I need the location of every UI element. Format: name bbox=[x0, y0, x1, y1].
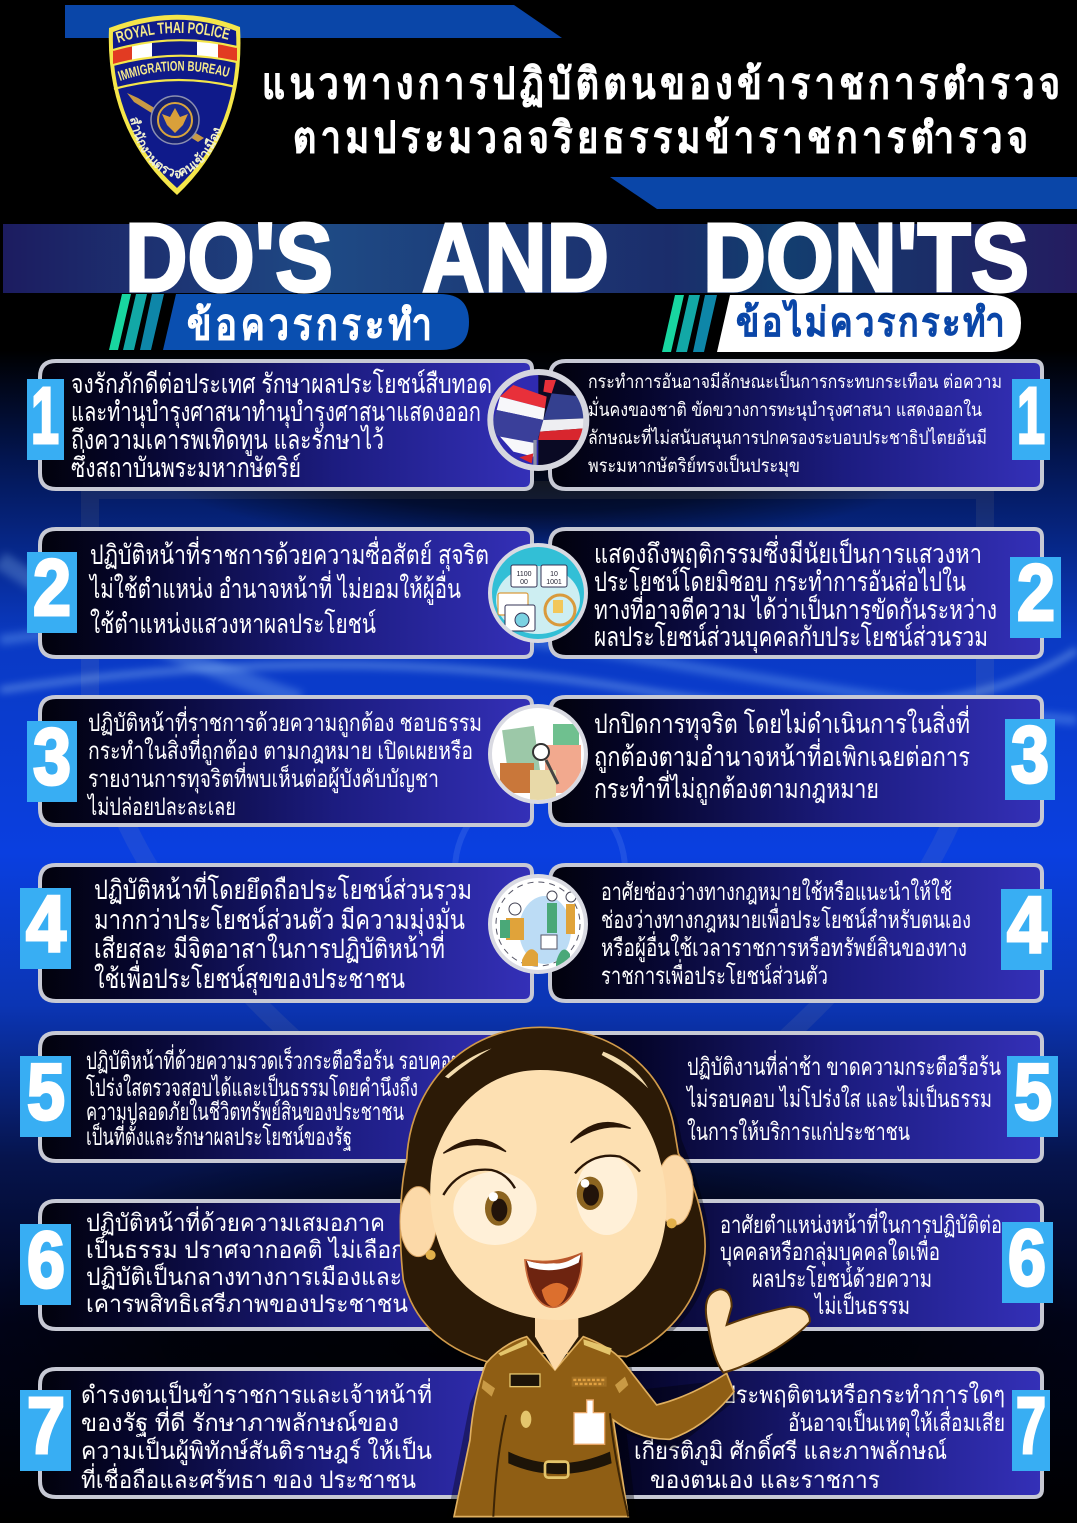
icon: people meeting bbox=[488, 874, 588, 974]
icon: data monitors: 1001 bbox=[546, 579, 562, 586]
don'ts card 7: ของตนเอง และราชการ bbox=[650, 1467, 880, 1494]
right numbers: 5 bbox=[1014, 1047, 1052, 1136]
do's card 1: และทำนุบำรุงศาสนาทำนุบำรุงศาสนาแสดงออก bbox=[71, 397, 481, 429]
don'ts card 4: อาศัยช่องว่างทางกฎหมายใช้หรือแนะนำให้ใช้ bbox=[601, 878, 952, 906]
don'ts card 6: ผลประโยชน์ด้วยความ bbox=[752, 1265, 932, 1293]
sub-heading: do's: ข้อควรกระทำ bbox=[187, 302, 432, 349]
don'ts card 6 bbox=[550, 1201, 1042, 1329]
do's card 2: ไม่ใช้ตำแหน่ง อำนาจหน้าที่ ไม่ยอมให้ผู้อื่น bbox=[88, 570, 461, 605]
character: police officer bbox=[400, 1027, 810, 1520]
neck bbox=[535, 1313, 578, 1371]
right numbers: 6 bbox=[1008, 1213, 1046, 1302]
left numbers: 3 bbox=[33, 712, 71, 801]
ears bbox=[400, 1187, 437, 1257]
do's card 4: มากกว่าประโยชน์ส่วนตัว มีความมุ่งมั่น bbox=[94, 901, 465, 937]
do's card 6: ปฏิบัติเป็นกลางทางการเมืองและ bbox=[86, 1262, 402, 1291]
do's card 1: จงรักภักดีต่อประเทศ รักษาผลประโยชน์สืบทอด bbox=[71, 368, 492, 399]
do's card 7: ความเป็นผู้พิทักษ์สันติราษฎร์ ให้เป็น bbox=[81, 1436, 432, 1466]
belt bbox=[508, 1452, 612, 1478]
sub-heading: do's bbox=[109, 294, 469, 350]
do's card 3: ไม่ปล่อยปละละเลย bbox=[86, 793, 236, 821]
badge text bbox=[115, 22, 230, 178]
don'ts card 5: ในการให้บริการแก่ประชาชน bbox=[687, 1118, 910, 1146]
left numbers: 5 bbox=[27, 1047, 65, 1136]
icon: data monitors: 10 bbox=[550, 571, 558, 578]
left numbers bbox=[26, 371, 71, 1470]
badge text: IMMIGRATION BUREAU bbox=[118, 61, 230, 81]
do's card 4: ใช้เพื่อประโยชน์สุขของประชาชน bbox=[94, 960, 405, 996]
do's card 3: กระทำในสิ่งที่ถูกต้อง ตามกฎหมาย เปิดเผยหรือ bbox=[88, 734, 473, 766]
heading band bbox=[3, 224, 1077, 293]
don'ts card 3: กระทำที่ไม่ถูกต้องตามกฎหมาย bbox=[594, 770, 879, 805]
mouth bbox=[525, 1253, 582, 1307]
left number tabs bbox=[20, 371, 77, 1471]
do's card 7: ดำรงตนเป็นข้าราชการและเจ้าหน้าที่ bbox=[81, 1378, 432, 1409]
right numbers bbox=[1007, 371, 1055, 1470]
do's card 5: ปฏิบัติหน้าที่ด้วยความรวดเร็วกระตือรือร้น รอบคอบ bbox=[86, 1044, 462, 1075]
do's card 1: ถึงความเคารพเทิดทูน และรักษาไว้ bbox=[71, 425, 384, 456]
badge text: ROYAL THAI POLICE bbox=[115, 22, 230, 43]
don'ts card 7: อันอาจเป็นเหตุให้เสื่อมเสีย bbox=[788, 1406, 1005, 1438]
sub-heading: don'ts bbox=[662, 295, 1021, 352]
don'ts card 7: ประพฤติตนหรือกระทำการใดๆ bbox=[722, 1381, 1005, 1409]
icon: thai flag bbox=[490, 372, 586, 468]
epaulettes and medals bbox=[482, 1339, 628, 1444]
don'ts card 4: หรือผู้อื่นใช้เวลาราชการหรือทรัพย์สินของทาง bbox=[601, 931, 967, 963]
earrings bbox=[426, 1250, 436, 1260]
do's card 2 bbox=[40, 529, 532, 657]
eyebrows bbox=[443, 1122, 631, 1153]
do's card 6 bbox=[40, 1201, 532, 1329]
don'ts card 2: ประโยชน์โดยมิชอบ กระทำการอันส่อไปใน bbox=[594, 566, 966, 597]
title bbox=[262, 61, 1060, 162]
icon: documents bbox=[488, 704, 588, 804]
right numbers: 3 bbox=[1011, 710, 1049, 799]
don'ts card 1: พระมหากษัตริย์ทรงเป็นประมุข bbox=[588, 453, 800, 478]
eyes bbox=[443, 1155, 640, 1245]
hair bbox=[400, 1027, 705, 1362]
do's card 2: ใช้ตำแหน่งแสวงหาผลประโยชน์ bbox=[90, 608, 376, 639]
do's card 6: เคารพสิทธิเสรีภาพของประชาชน bbox=[86, 1291, 408, 1318]
uniform bbox=[454, 1337, 734, 1517]
do's card 6: เป็นธรรม ปราศจากอคติ ไม่เลือก bbox=[86, 1235, 405, 1264]
don'ts card 7: เกียรติภูมิ ศักดิ์ศรี และภาพลักษณ์ bbox=[634, 1433, 947, 1466]
title: แนวทางการปฏิบัติตนของข้าราชการตำรวจ bbox=[262, 61, 1060, 108]
icon: data monitors bbox=[488, 543, 588, 643]
arm line bbox=[493, 1413, 628, 1517]
hair shine bbox=[445, 1048, 648, 1088]
don'ts card 3 bbox=[550, 697, 1042, 825]
don'ts card 1 bbox=[550, 361, 1042, 489]
main heading: DON'TS bbox=[703, 203, 1029, 312]
badge: immigration bureau shield bbox=[108, 14, 240, 195]
left numbers: 7 bbox=[27, 1381, 65, 1470]
do's card 5: เป็นที่ตั้งและรักษาผลประโยชน์ของรัฐ bbox=[86, 1119, 352, 1151]
title: ตามประมวลจริยธรรมข้าราชการตำรวจ bbox=[293, 115, 1028, 162]
do's card 6: ปฏิบัติหน้าที่ด้วยความเสมอภาค bbox=[86, 1206, 385, 1237]
don'ts card 1: มั่นคงของชาติ ขัดขวางการทะนุบำรุงศาสนา แสดงออกใน bbox=[588, 396, 982, 422]
don'ts card 6: บุคคลหรือกลุ่มบุคคลใดเพื่อ bbox=[720, 1235, 940, 1267]
do's card 3 bbox=[40, 697, 532, 825]
don'ts card 7 bbox=[550, 1369, 1042, 1497]
don'ts card 5 bbox=[550, 1033, 1042, 1161]
do's card 4: เสียสละ มีจิตอาสาในการปฏิบัติหน้าที่ bbox=[94, 930, 445, 964]
drop shadow bbox=[405, 1033, 740, 1520]
main heading: AND bbox=[422, 203, 609, 312]
don'ts card 4 bbox=[550, 865, 1042, 1001]
left numbers: 6 bbox=[27, 1215, 65, 1304]
don'ts card 1: ลักษณะที่ไม่สนับสนุนการปกครองระบอบประชาธิปไตยอันมี bbox=[588, 424, 987, 450]
main heading bbox=[125, 203, 1029, 312]
do's card 4 bbox=[40, 865, 532, 1001]
don'ts card 3: ปกปิดการทุจริต โดยไม่ดำเนินการในสิ่งที่ bbox=[594, 705, 970, 741]
right numbers: 1 bbox=[1017, 371, 1045, 460]
main heading: DO'S bbox=[125, 203, 333, 312]
lower right blue banner bbox=[610, 177, 1077, 209]
do's card 5: ความปลอดภัยในชีวิตทรัพย์สินของประชาชน bbox=[86, 1098, 404, 1126]
do's card 7: ของรัฐ ที่ดี รักษาภาพลักษณ์ของ bbox=[81, 1406, 399, 1437]
don'ts card 4: ช่องว่างทางกฎหมายเพื่อประโยชน์สำหรับตนเอง bbox=[601, 903, 971, 934]
do's card 5: โปร่งใสตรวจสอบได้และเป็นธรรมโดยคำนึงถึง bbox=[86, 1073, 418, 1102]
icon: data monitors: 00 bbox=[520, 579, 528, 586]
left numbers: 2 bbox=[33, 543, 71, 632]
right number tabs bbox=[1001, 371, 1061, 1471]
do's card 1: ซึ่งสถาบันพระมหากษัตริย์ bbox=[71, 449, 301, 483]
do's card 3: รายงานการทุจริตที่พบเห็นต่อผู้บังคับบัญชา bbox=[88, 762, 439, 794]
do's card 1 bbox=[40, 361, 532, 489]
don'ts card 6: ไม่เป็นธรรม bbox=[813, 1291, 910, 1320]
top blue banner bbox=[65, 5, 562, 38]
don'ts card 3: ถูกต้องตามอำนาจหน้าที่อเพิกเฉยต่อการ bbox=[594, 738, 970, 773]
do's card 7 bbox=[40, 1369, 532, 1497]
right numbers: 2 bbox=[1017, 548, 1055, 637]
don'ts card 1: กระทำการอันอาจมีลักษณะเป็นการกระทบกระเทือน ต่อความ bbox=[588, 369, 1002, 393]
do's card 7: ที่เชื่อถือและศรัทธา ของ ประชาชน bbox=[81, 1463, 416, 1494]
do's card 2: ปฏิบัติหน้าที่ราชการด้วยความซื่อสัตย์ สุจริต bbox=[90, 536, 489, 572]
right numbers: 7 bbox=[1016, 1381, 1046, 1470]
don'ts card 2: แสดงถึงพฤติกรรมซึ่งมีนัยเป็นการแสวงหา bbox=[594, 535, 982, 569]
do's card 5 bbox=[40, 1033, 532, 1161]
right numbers: 4 bbox=[1007, 880, 1047, 969]
badge text: สำนักงานตรวจคนเข้าเมือง bbox=[130, 117, 221, 178]
left numbers: 4 bbox=[26, 879, 66, 968]
do's card 4: ปฏิบัติหน้าที่โดยยึดถือประโยชน์ส่วนรวม bbox=[94, 871, 472, 905]
sub-heading: don'ts: ข้อไม่ควรกระทำ bbox=[736, 298, 1005, 345]
left numbers: 1 bbox=[31, 371, 59, 460]
icon: data monitors: 1100 bbox=[516, 571, 532, 578]
don'ts card 2 bbox=[550, 529, 1042, 657]
don'ts card 4: ราชการเพื่อประโยชน์ส่วนตัว bbox=[601, 959, 828, 990]
hand bbox=[706, 1289, 810, 1373]
do's card 3: ปฏิบัติหน้าที่ราชการด้วยความถูกต้อง ชอบธรรม bbox=[88, 706, 482, 738]
face bbox=[430, 1070, 666, 1320]
